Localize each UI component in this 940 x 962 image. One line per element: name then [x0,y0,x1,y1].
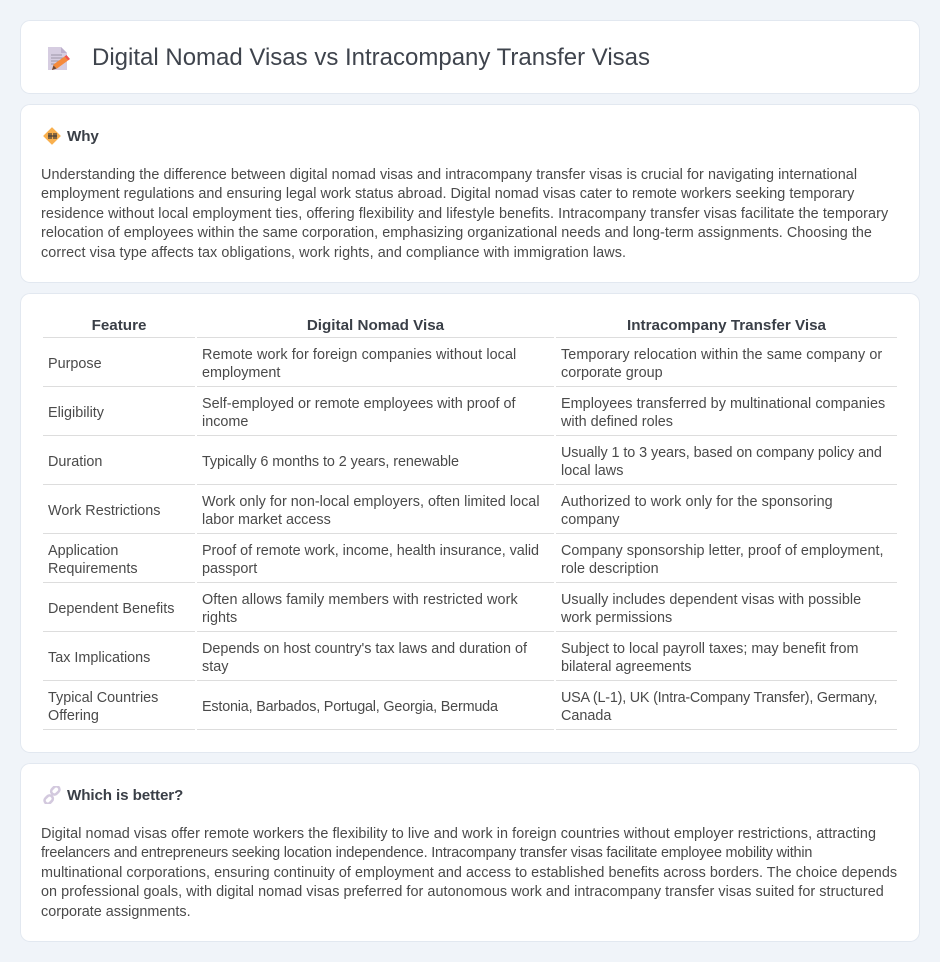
panel: comparison table [20,293,920,753]
row: tax implications [43,640,897,681]
text block: which is better paragraph [41,826,897,920]
panel: title card [20,20,920,94]
row: work restrictions: Authorized to work only for the sponsoring [561,494,833,510]
text block: why paragraph: employment regulations and ensuring legal work status abroad. Digital nomad visas cater to remote workers seeking temporary [41,186,854,202]
row: work restrictions [43,494,897,534]
row: eligibility [43,396,897,436]
row: application requirements: role description [561,560,659,576]
row: purpose: Purpose [48,356,102,372]
row: tax implications: stay [202,658,228,674]
text block: which is better paragraph: freelancers and entrepreneurs seeking location independence. Intracompany transfer visas facilitate employee mobility within [41,845,812,861]
row: duration: local laws [561,462,623,478]
row: work restrictions: Work only for non-local employers, often limited local [202,494,540,510]
row: work restrictions: Work Restrictions [48,502,160,518]
row: dependent benefits: Usually includes dependent visas with possible [561,592,861,608]
table header: Digital Nomad Visa [307,317,444,334]
row: tax implications: Tax Implications [48,650,150,666]
title: Digital Nomad Visas vs Intracompany Transfer Visas [92,44,650,71]
row: application requirements: Application [48,542,118,558]
text block: why paragraph: relocation of employees within the same corporation, emphasizing organizational needs and long-term assignments. Choosing the [41,225,872,241]
text block: why paragraph: correct visa type affects tax obligations, work rights, and compliance with immigration laws. [41,245,626,261]
row: dependent benefits [43,592,897,632]
text block: why paragraph: Understanding the difference between digital nomad visas and intracompany transfer visas is crucial for navigating international [41,167,857,183]
row: typical countries: Typical Countries [48,690,158,706]
text block: which is better paragraph: corporate assignments. [41,904,191,920]
icon: orange diamond sign [43,127,61,145]
row: dependent benefits: work permissions [561,610,672,626]
text block: which is better paragraph: Digital nomad visas offer remote workers the flexibility to live and work in foreign countries without employer restrictions, attracting [41,826,876,842]
row: tax implications: bilateral agreements [561,658,691,674]
table header: Intracompany Transfer Visa [627,317,826,334]
text block: which is better paragraph: multinational corporations, ensuring continuity of employment and access to established benefits across borders. The choice depends [41,865,897,881]
row: purpose: corporate group [561,364,663,380]
text block: why paragraph: residence without local employment ties, offering flexibility and lifestyle benefits. Intracompany transfer visas facilitate the temporary [41,206,888,222]
row: work restrictions: company [561,512,619,528]
row: dependent benefits: Often allows family members with restricted work [202,592,518,608]
row: typical countries: Offering [48,708,99,724]
row: typical countries: Canada [561,708,611,724]
heading: which is better: Which is better? [67,787,183,804]
row: tax implications: Subject to local payroll taxes; may benefit from [561,640,859,656]
row: application requirements: Proof of remote work, income, health insurance, valid [202,542,539,558]
row: tax implications: Depends on host country's tax laws and duration of [202,640,527,656]
row: eligibility: Eligibility [48,404,104,420]
row: application requirements [43,542,897,583]
text block: which is better paragraph: on professional goals, with digital nomad visas preferred for autonomous work and intracompany transfer visas suited for structured [41,884,884,900]
row: dependent benefits: rights [202,610,237,626]
row: purpose: Temporary relocation within the same company or [561,346,882,362]
row: duration: Typically 6 months to 2 years, renewable [202,454,459,470]
row: application requirements: passport [202,560,257,576]
row: duration: Duration [48,454,102,470]
table header: Feature [92,317,146,334]
row: duration: Usually 1 to 3 years, based on company policy and [561,444,882,460]
row: typical countries [43,690,897,730]
table header [43,317,897,730]
panel: why [20,104,920,283]
row: purpose [43,346,897,387]
row: application requirements: Requirements [48,560,138,576]
row: eligibility: with defined roles [561,414,673,430]
text block: why paragraph [41,167,888,261]
comparison table [43,317,897,730]
row: application requirements: Company sponsorship letter, proof of employment, [561,542,884,558]
panel: which is better [20,763,920,942]
row: duration [43,444,897,485]
icon: chain link [43,786,61,804]
row: work restrictions: labor market access [202,512,331,528]
row: purpose: Remote work for foreign companies without local [202,346,516,362]
row: eligibility: Self-employed or remote employees with proof of [202,396,516,412]
row: typical countries: Estonia, Barbados, Portugal, Georgia, Bermuda [202,698,498,714]
row: purpose: employment [202,364,280,380]
row: typical countries: USA (L-1), UK (Intra-Company Transfer), Germany, [561,690,877,706]
row: eligibility: income [202,414,248,430]
heading: why: Why [67,128,99,145]
icon: memo with pencil [48,47,70,70]
row: dependent benefits: Dependent Benefits [48,600,174,616]
row: eligibility: Employees transferred by multinational companies [561,396,885,412]
